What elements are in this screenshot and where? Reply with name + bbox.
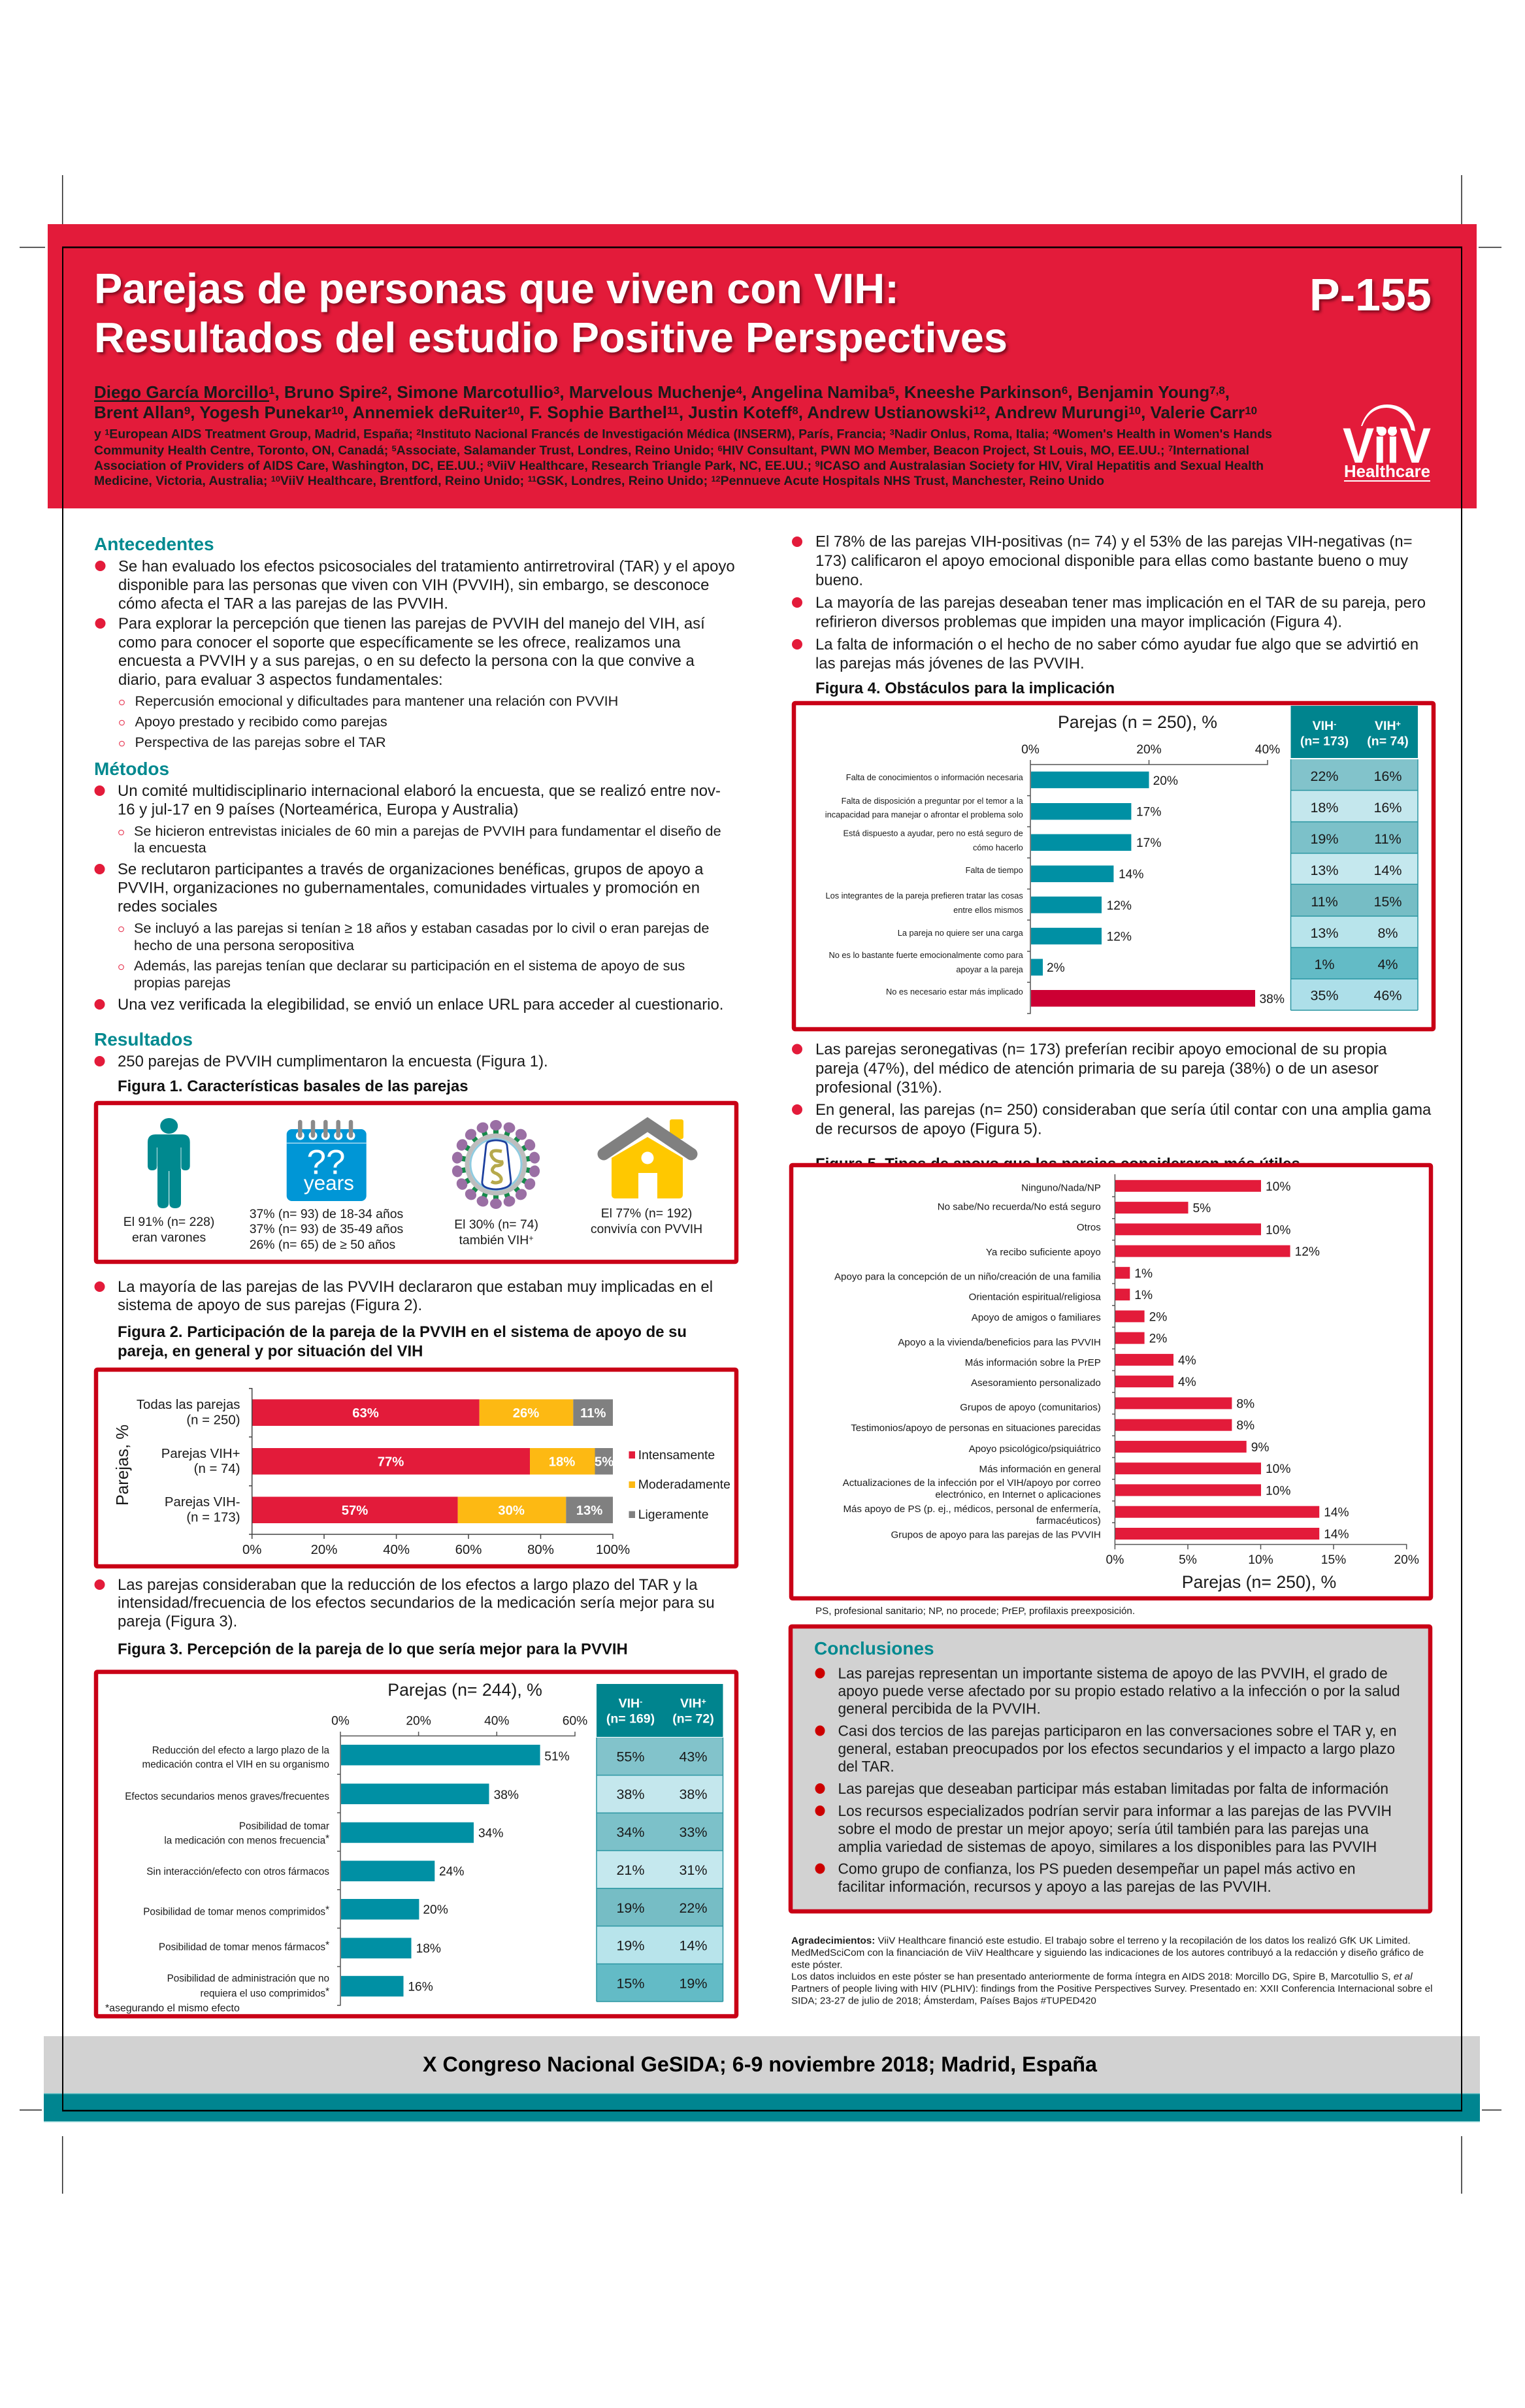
value labels: [1047, 774, 1285, 1006]
section: Antecedentes: como para conocer el soporte que específicamente se les ofrece, realizamos una: [118, 634, 681, 651]
x axis labels: 60%: [455, 1543, 482, 1557]
category labels: cómo hacerlo: [973, 843, 1023, 853]
legend: Moderadamente: [638, 1477, 730, 1492]
axis: [337, 1732, 575, 2005]
icon: calendar: years: [304, 1171, 354, 1195]
table: 13%: [1310, 863, 1339, 878]
icon: person: [148, 1118, 190, 1208]
text: emotional support bullets: bueno.: [815, 572, 863, 589]
text: acknowledgements: SIDA; 23-27 de julio de 2018; Ámsterdam, Países Bajos #TUPED420: [791, 1996, 1096, 2007]
heading: Figura 4: Figura 4. Obstáculos para la implicación: [815, 680, 1115, 697]
x axis labels: 20%: [311, 1543, 337, 1557]
icon: house: [604, 1119, 691, 1198]
category labels: Parejas VIH-: [165, 1495, 240, 1509]
category labels: electrónico, en Internet o aplicaciones: [935, 1489, 1101, 1500]
panel: Figura 1: [96, 1103, 736, 1262]
text: support preferences bullets: de recursos de apoyo (Figura 5).: [815, 1120, 1042, 1138]
section: Antecedentes: diario, para evaluar 3 aspectos fundamentales:: [118, 671, 443, 689]
caption: men: [123, 1215, 214, 1245]
caption: HIV positive: [454, 1217, 538, 1247]
panel: Figura 3 chart: [96, 1672, 736, 2017]
category labels: Apoyo a la vivienda/beneficios para las PVVIH: [898, 1337, 1101, 1348]
panel: Figura 5 chart: [791, 1165, 1431, 1598]
section: Antecedentes: Apoyo prestado y recibido como parejas: [135, 714, 387, 730]
value labels: 14%: [1324, 1528, 1349, 1542]
text: support preferences bullets: pareja (47%), del médico de atención primaria de su pareja (38%) o de un asesor: [815, 1060, 1379, 1078]
table: [1291, 706, 1418, 1010]
panel: Figura 5 chart: 5%: [1179, 1553, 1197, 1567]
table: 19%: [616, 1938, 645, 1954]
value labels: 9%: [1251, 1441, 1269, 1455]
text: emotional support bullets: [792, 533, 1426, 672]
bars: [1115, 1180, 1319, 1540]
legend: Ligeramente: [638, 1508, 708, 1522]
affiliations: [94, 427, 1272, 488]
conclusions list: general percibida de la PVVIH.: [838, 1700, 1041, 1717]
stacked bars: 63%: [352, 1406, 379, 1421]
value labels: 17%: [1136, 806, 1161, 819]
conclusions list: [815, 1664, 1400, 1895]
text: implication bullet: sistema de apoyo de sus parejas (Figura 2).: [118, 1296, 422, 1314]
table: 16%: [1373, 768, 1402, 784]
caption: cohabiting: El 77% (n= 192): [601, 1206, 692, 1221]
chart title: Parejas (n= 244), %: [387, 1680, 542, 1700]
value labels: 18%: [416, 1942, 441, 1956]
text: long-term effects bullet: intensidad/frecuencia de los efectos secundarios de la medicación sería mejor para su: [118, 1594, 715, 1611]
panel: Figura 3 chart: 40%: [484, 1715, 510, 1728]
section: Antecedentes: cómo afecta el TAR a las parejas de las PVVIH.: [118, 595, 448, 613]
value labels: 14%: [1324, 1506, 1349, 1520]
value labels: 2%: [1149, 1310, 1167, 1324]
text: emotional support bullets: La falta de información o el hecho de no saber cómo ayudar fue algo que se advirtió en: [815, 636, 1418, 653]
section: Antecedentes: encuesta a PVVIH y a sus parejas, o en su defecto la persona con la que convive a: [118, 652, 695, 670]
category labels: Ya recibo suficiente apoyo: [986, 1247, 1101, 1258]
category labels: Falta de conocimientos o información necesaria: [846, 772, 1024, 782]
table: 11%: [1374, 831, 1402, 847]
table: (n= 74): [1367, 734, 1409, 749]
table: VIH+: [1375, 719, 1401, 733]
table: 19%: [679, 1976, 708, 1992]
category labels: Ninguno/Nada/NP: [1021, 1182, 1101, 1193]
value labels: 17%: [1136, 836, 1161, 850]
section: Métodos: Además, las parejas tenían que declarar su participación en el sistema de apoyo de sus: [134, 957, 685, 974]
category labels: Grupos de apoyo para las parejas de las PVVIH: [891, 1529, 1101, 1541]
table: VIH+: [680, 1696, 706, 1711]
caption: ages: 37% (n= 93) de 18-34 años: [250, 1207, 403, 1221]
category labels: La pareja no quiere ser una carga: [898, 928, 1024, 938]
table: 46%: [1373, 988, 1402, 1004]
affiliations: Association of Providers of AIDS Care, Washington, DC, EE.UU.; 8ViiV Healthcare, Research Triangle Park, NC, EE.UU.; 9ICASO and Australasian Society for HIV, Viral Hepatitis and Sexual Health: [94, 459, 1264, 473]
table: 55%: [616, 1749, 645, 1764]
axis: [1112, 1174, 1407, 1549]
x axis title: Parejas (n= 250), %: [1182, 1572, 1336, 1592]
value labels: 5%: [1193, 1202, 1211, 1215]
congress name: X Congreso Nacional GeSIDA; 6-9 noviembre 2018; Madrid, España: [423, 2053, 1098, 2076]
stacked bars: 26%: [513, 1406, 539, 1421]
category labels: Posibilidad de tomar menos fármacos*: [159, 1939, 329, 1953]
category labels: Testimonios/apoyo de personas en situaciones parecidas: [851, 1423, 1101, 1434]
text: emotional support bullets: 173) calificaron el apoyo emocional disponible para ellas como bastante bueno o muy: [815, 552, 1408, 570]
y axis title: Parejas, %: [114, 1425, 132, 1506]
value labels: 34%: [478, 1827, 503, 1841]
category labels: (n = 74): [194, 1462, 240, 1476]
category labels: Orientación espiritual/religiosa: [969, 1292, 1101, 1303]
value labels: 10%: [1266, 1223, 1290, 1237]
table: 19%: [616, 1900, 645, 1916]
category labels: (n = 173): [186, 1511, 240, 1525]
category labels: Grupos de apoyo (comunitarios): [960, 1402, 1101, 1413]
affiliations: y 1European AIDS Treatment Group, Madrid, España; 2Instituto Nacional Francés de Investigación Médica (INSERM), París, Francia; 3Nadir Onlus, Roma, Italia; 4Women's Health in Women's Hands: [94, 427, 1272, 442]
value labels: 14%: [1119, 868, 1143, 882]
caption: HIV positive: también VIH+: [459, 1233, 534, 1247]
category labels: Más información en general: [979, 1464, 1101, 1475]
icon: ViiV Healthcare logo: [1343, 404, 1431, 482]
text: long-term effects bullet: [94, 1576, 715, 1630]
text: support preferences bullets: [792, 1040, 1432, 1138]
heading: Antecedentes: Antecedentes: [94, 534, 214, 554]
stacked bars: 18%: [549, 1455, 575, 1469]
value labels: [408, 1750, 570, 1994]
panel: Figura 5 chart: 0%: [1106, 1553, 1124, 1567]
text: emotional support bullets: La mayoría de las parejas deseaban tener mas implicación en el TAR de su pareja, pero: [815, 594, 1426, 612]
value labels: 12%: [1107, 931, 1132, 944]
footnote: *asegurando el mismo efecto: [105, 2003, 240, 2014]
icon: calendar: ??: [307, 1144, 345, 1182]
category labels: entre ellos mismos: [953, 905, 1023, 915]
stacked bars: 13%: [576, 1504, 602, 1518]
value labels: 12%: [1107, 899, 1132, 913]
table: 16%: [1373, 800, 1402, 816]
value labels: [1134, 1180, 1349, 1542]
value labels: 51%: [544, 1750, 570, 1764]
table: 35%: [1310, 988, 1339, 1004]
section: Resultados intro: 250 parejas de PVVIH cumplimentaron la encuesta (Figura 1).: [118, 1053, 548, 1070]
x axis labels: 0%: [242, 1543, 261, 1557]
text: acknowledgements: [791, 1936, 1432, 2007]
text: acknowledgements: Partners of people living with HIV (PLHIV): findings from the Positive Perspectives Survey. Presentado en: XXII Conferencia Internacional sobre el: [791, 1983, 1432, 1994]
value labels: 4%: [1178, 1376, 1196, 1389]
panel: Figura 4 chart: [794, 703, 1434, 1029]
category labels: Sin interacción/efecto con otros fármacos: [146, 1866, 329, 1877]
table: (n= 173): [1300, 734, 1349, 749]
stacked bars: 30%: [498, 1504, 525, 1518]
category labels: Parejas VIH+: [161, 1447, 240, 1461]
text: support preferences bullets: En general, las parejas (n= 250) consideraban que sería útil contar con una amplia gama: [815, 1101, 1432, 1119]
caption: cohabiting: [591, 1206, 702, 1236]
x axis labels: 40%: [383, 1543, 410, 1557]
footer band: [44, 2036, 1480, 2122]
category labels: la medicación con menos frecuencia*: [164, 1833, 329, 1847]
footnote: abbreviations: PS, profesional sanitario; NP, no procede; PrEP, profilaxis preexposición.: [815, 1606, 1135, 1617]
conclusions list: amplia variedad de sistemas de apoyo, similares a los disponibles para las PVVIH: [838, 1838, 1377, 1855]
value labels: 38%: [494, 1789, 519, 1802]
table: (n= 72): [672, 1712, 714, 1726]
category labels: Posibilidad de tomar menos comprimidos*: [143, 1904, 329, 1918]
category labels: Apoyo psicológico/psiquiátrico: [969, 1443, 1101, 1455]
heading: Figura 5: Figura 5. Tipos de apoyo que las parejas consideraron más útiles: [815, 1155, 1300, 1173]
authors: [94, 382, 1257, 422]
heading: Conclusiones: Conclusiones: [814, 1638, 934, 1658]
text: long-term effects bullet: pareja (Figura 3).: [118, 1613, 237, 1630]
legend: Intensamente: [638, 1448, 715, 1462]
category labels: (n = 250): [186, 1413, 240, 1428]
category labels: [137, 1398, 240, 1525]
poster title: Parejas de personas que viven con VIH:: [94, 265, 899, 312]
section: Métodos: hecho de una persona seropositiva: [134, 937, 355, 953]
heading: Figura 3: Figura 3. Percepción de la pareja de lo que sería mejor para la PVVIH: [118, 1641, 628, 1658]
bars: [341, 1745, 540, 1996]
conclusions list: Las parejas representan un importante sistema de apoyo de las PVVIH, el grado de: [838, 1664, 1388, 1681]
text: acknowledgements: Agradecimientos: ViiV Healthcare financió este estudio. El trabajo sobre el terreno y la recopilación de los datos los realizó GfK UK Limited.: [791, 1936, 1411, 1946]
text: acknowledgements: Los datos incluidos en este póster se han presentado anteriormente de forma íntegra en AIDS 2018: Morcillo DG, Spire B, Marcotullio S, et al: [791, 1971, 1413, 1983]
panel: Figura 5 chart: 10%: [1248, 1553, 1273, 1567]
category labels: incapacidad para manejar o afrontar el problema solo: [825, 810, 1023, 819]
table: [597, 1684, 723, 2002]
conclusions list: general, estaban preocupados por los efectos secundarios y el impacto a largo plazo: [838, 1740, 1395, 1757]
value labels: 10%: [1266, 1484, 1290, 1498]
conclusions list: facilitar información, recursos y apoyo a las parejas de las PVVIH.: [838, 1878, 1271, 1895]
section: Métodos: PVVIH, organizaciones no gubernamentales, comunidades virtuales y promoción en: [118, 880, 700, 897]
panel: Figura 5 chart: 20%: [1394, 1553, 1419, 1567]
category labels: Asesoramiento personalizado: [971, 1377, 1101, 1389]
stacked bars: 11%: [580, 1406, 606, 1421]
table: 38%: [616, 1787, 645, 1802]
bars: [1031, 772, 1255, 1006]
section: Métodos: Un comité multidisciplinario internacional elaboró la encuesta, que se realizó entre nov-: [118, 782, 721, 800]
value labels: 12%: [1295, 1245, 1320, 1259]
category labels: Posibilidad de administración que no: [167, 1973, 329, 1984]
panel: Figura 2 chart: [96, 1370, 736, 1566]
category labels: Otros: [1077, 1222, 1101, 1233]
conclusions list: Los recursos especializados podrían servir para informar a las parejas de las PVVIH: [838, 1802, 1392, 1819]
poster title: [94, 265, 1008, 361]
caption: ages: 26% (n= 65) de ≥ 50 años: [250, 1238, 395, 1252]
caption: ages: 37% (n= 93) de 35-49 años: [250, 1222, 403, 1236]
category labels: [825, 772, 1024, 997]
stacked bars: [252, 1399, 614, 1523]
section: Resultados intro: [94, 1029, 548, 1070]
poster number: P-155: [1309, 269, 1432, 320]
text: emotional support bullets: refirieron diversos problemas que impiden una mayor implicación (Figura 4).: [815, 613, 1342, 631]
conclusions list: apoyo puede verse afectado por su propio estado relativo a la infección o por la salud: [838, 1683, 1400, 1700]
heading: Resultados: Resultados: [94, 1029, 193, 1049]
panel: Figura 5 chart: 15%: [1321, 1553, 1346, 1567]
heading: Métodos: Métodos: [94, 759, 169, 779]
stacked bars: 5%: [595, 1455, 614, 1469]
section: Antecedentes: [94, 534, 735, 750]
value labels: 8%: [1236, 1419, 1254, 1433]
icon: ViiV Healthcare logo: Healthcare: [1344, 461, 1430, 481]
value labels: 1%: [1134, 1289, 1153, 1302]
category labels: Reducción del efecto a largo plazo de la: [152, 1745, 330, 1757]
value labels: 24%: [439, 1865, 464, 1879]
value labels: 2%: [1047, 961, 1065, 975]
section: Antecedentes: Perspectiva de las parejas sobre el TAR: [135, 734, 386, 750]
value labels: 10%: [1266, 1462, 1290, 1476]
section: Métodos: [94, 759, 723, 1014]
value labels: 16%: [408, 1981, 433, 1994]
category labels: Los integrantes de la pareja prefieren tratar las cosas: [825, 891, 1023, 900]
section: Métodos: redes sociales: [118, 898, 218, 915]
text: long-term effects bullet: Las parejas consideraban que la reducción de los efectos a largo plazo del TAR y la: [118, 1576, 698, 1594]
caption: HIV positive: El 30% (n= 74): [454, 1217, 538, 1232]
authors: Diego García Morcillo1, Bruno Spire2, Simone Marcotullio3, Marvelous Muchenje4, Angelina Namiba5, Kneeshe Parkinson6, Benjamin Young7,8,: [94, 382, 1230, 402]
heading: Figura 2: pareja, en general y por situación del VIH: [118, 1342, 423, 1361]
heading: Figura 1: Figura 1. Características basales de las parejas: [118, 1078, 468, 1095]
stacked bars: 57%: [342, 1504, 368, 1518]
panel: Figura 3 chart: 0%: [331, 1715, 350, 1728]
table: (n= 169): [606, 1712, 655, 1726]
table: 22%: [679, 1900, 708, 1916]
table: 34%: [616, 1824, 645, 1840]
text: implication bullet: [94, 1278, 713, 1314]
category labels: Más apoyo de PS (p. ej., médicos, personal de enfermería,: [843, 1504, 1101, 1515]
category labels: No es necesario estar más implicado: [886, 987, 1023, 997]
category labels: Falta de disposición a preguntar por el temor a la: [842, 796, 1024, 806]
panel: Figura 4 chart: 20%: [1136, 743, 1162, 757]
value labels: 1%: [1134, 1267, 1153, 1281]
affiliations: Community Health Centre, Toronto, ON, Canadá; 5Associate, Salamander Trust, Londres, Reino Unido; 6HIV Consultant, PWN MO Member, Beacon Project, St Louis, MO, EE.UU.; 7International: [94, 444, 1249, 457]
heading: Figura 2: Figura 2. Participación de la pareja de la PVVIH en el sistema de apoyo de su: [118, 1323, 687, 1341]
table: 21%: [616, 1862, 645, 1878]
text: emotional support bullets: El 78% de las parejas VIH-positivas (n= 74) y el 53% de las parejas VIH-negativas (n=: [815, 533, 1413, 551]
category labels: No sabe/No recuerda/No está seguro: [938, 1202, 1101, 1213]
section: Métodos: Se reclutaron participantes a través de organizaciones benéficas, grupos de apoyo a: [118, 861, 704, 878]
axis: [1027, 760, 1268, 1014]
text: acknowledgements: este póster.: [791, 1960, 843, 1971]
table: 19%: [1310, 831, 1339, 847]
section: Métodos: la encuesta: [134, 840, 207, 856]
icon: calendar: [287, 1122, 367, 1201]
section: Métodos: Se incluyó a las parejas si tenían ≥ 18 años y estaban casadas por lo civil o eran parejas de: [134, 920, 709, 936]
text: implication bullet: La mayoría de las parejas de las PVVIH declararon que estaban muy implicadas en el: [118, 1278, 713, 1296]
x axis labels: 100%: [596, 1543, 630, 1557]
panel: Figura 4 chart: 40%: [1255, 743, 1280, 757]
section: Antecedentes: Para explorar la percepción que tienen las parejas de PVVIH del manejo del VIH, así: [118, 615, 705, 633]
category labels: Está dispuesto a ayudar, pero no está seguro de: [843, 829, 1023, 838]
category labels: Apoyo de amigos o familiares: [972, 1312, 1101, 1323]
heading: Figura 2: [118, 1323, 687, 1361]
panel: Figura 4 chart: 0%: [1021, 743, 1040, 757]
category labels: Posibilidad de tomar: [239, 1821, 329, 1832]
table: 4%: [1377, 957, 1398, 972]
category labels: Actualizaciones de la infección por el VIH/apoyo por correo: [843, 1477, 1101, 1489]
panel: Conclusiones: [791, 1626, 1430, 1911]
text: acknowledgements: MedMedSciCom con la financiación de ViiV Healthcare y siguiendo las indicaciones de los autores contribuyó a la redacción y diseño gráfico de: [791, 1947, 1424, 1958]
x axis labels: 80%: [527, 1543, 554, 1557]
table: 33%: [679, 1824, 708, 1840]
caption: ages: [250, 1207, 403, 1252]
panel: Figura 3 chart: 60%: [563, 1715, 587, 1728]
value labels: 4%: [1178, 1354, 1196, 1368]
conclusions list: sobre el modo de prestar un mejor apoyo; sería útil también para las parejas una: [838, 1821, 1369, 1838]
legend: [629, 1448, 730, 1522]
category labels: Apoyo para la concepción de un niño/creación de una familia: [834, 1272, 1101, 1282]
table: 43%: [679, 1749, 708, 1764]
table: 15%: [616, 1976, 645, 1992]
conclusions list: Como grupo de confianza, los PS pueden desempeñar un papel más activo en: [838, 1860, 1356, 1877]
text: emotional support bullets: las parejas más jóvenes de las PVVIH.: [815, 655, 1085, 672]
x axis labels: [242, 1543, 630, 1557]
category labels: No es lo bastante fuerte emocionalmente como para: [828, 950, 1024, 960]
table: VIH-: [1313, 719, 1336, 733]
affiliations: Medicine, Victoria, Australia; 10ViiV Healthcare, Brentford, Reino Unido; 11GSK, Londres, Reino Unido; 12Pennueve Acute Hospitals NHS Trust, Manchester, Reino Unido: [94, 474, 1104, 488]
value labels: 20%: [1153, 774, 1178, 788]
conclusions list: Las parejas que deseaban participar más estaban limitadas por falta de información: [838, 1780, 1388, 1797]
table: 22%: [1310, 768, 1339, 784]
table: 31%: [679, 1862, 708, 1878]
category labels: Más información sobre la PrEP: [965, 1357, 1101, 1368]
category labels: Efectos secundarios menos graves/frecuentes: [125, 1791, 329, 1802]
caption: men: El 91% (n= 228): [123, 1215, 214, 1229]
caption: cohabiting: convivía con PVVIH: [591, 1222, 702, 1236]
table: VIH-: [619, 1696, 642, 1711]
section: Métodos: propias parejas: [134, 974, 231, 991]
table: 8%: [1377, 925, 1398, 941]
section: Métodos: 16 y jul-17 en 9 países (Norteamérica, Europa y Australia): [118, 801, 519, 818]
category labels: apoyar a la pareja: [956, 965, 1024, 974]
section: Antecedentes: disponible para las personas que viven con VIH (PVVIH), sin embargo, se desconoce: [118, 576, 709, 594]
table: 1%: [1314, 957, 1335, 972]
authors: Brent Allan9, Yogesh Punekar10, Annemiek deRuiter10, F. Sophie Barthel11, Justin Koteff8, Andrew Ustianowski12, Andrew Murungi10, Valerie Carr10: [94, 403, 1257, 422]
category labels: [125, 1745, 330, 2000]
table: 14%: [679, 1938, 708, 1954]
text: support preferences bullets: Las parejas seronegativas (n= 173) preferían recibir apoyo emocional de su propia: [815, 1040, 1387, 1059]
value labels: 10%: [1266, 1180, 1290, 1194]
header band: [48, 224, 1477, 508]
value labels: 2%: [1149, 1332, 1167, 1346]
category labels: [834, 1182, 1101, 1541]
value labels: 20%: [423, 1904, 448, 1917]
table: 14%: [1373, 863, 1402, 878]
section: Métodos: Se hicieron entrevistas iniciales de 60 min a parejas de PVVIH para fundamentar el diseño de: [134, 823, 721, 839]
stacked bars: 77%: [378, 1455, 404, 1469]
panel: Figura 3 chart: 20%: [406, 1715, 431, 1728]
conclusions list: del TAR.: [838, 1758, 894, 1775]
table: 11%: [1311, 894, 1338, 910]
value labels: 8%: [1236, 1397, 1254, 1411]
category labels: requiera el uso comprimidos*: [200, 1986, 329, 2000]
category labels: Todas las parejas: [137, 1398, 240, 1412]
section: Antecedentes: Se han evaluado los efectos psicosociales del tratamiento antirretroviral (TAR) y el apoyo: [118, 558, 735, 576]
table: 38%: [679, 1787, 708, 1802]
poster title: Resultados del estudio Positive Perspectives: [94, 314, 1008, 361]
text: support preferences bullets: profesional (31%).: [815, 1079, 942, 1097]
category labels: Falta de tiempo: [966, 865, 1023, 875]
value labels: 38%: [1260, 993, 1285, 1006]
section: Antecedentes: Repercusión emocional y dificultades para mantener una relación con PVVIH: [135, 693, 618, 709]
conclusions list: Casi dos tercios de las parejas participaron en las conversaciones sobre el TAR y, en: [838, 1723, 1397, 1740]
category labels: medicación contra el VIH en su organismo: [142, 1759, 329, 1770]
category labels: farmacéuticos): [1036, 1515, 1101, 1526]
table: 13%: [1310, 925, 1339, 941]
icon: ViiV Healthcare logo: ViiV: [1343, 418, 1431, 474]
caption: men: eran varones: [132, 1230, 206, 1245]
chart title: Parejas (n = 250), %: [1058, 712, 1217, 732]
icon: HIV virus: [451, 1120, 541, 1209]
table: 18%: [1310, 800, 1339, 816]
table: 15%: [1373, 894, 1402, 910]
section: Métodos: Una vez verificada la elegibilidad, se envió un enlace URL para acceder al cuestionario.: [118, 996, 723, 1014]
